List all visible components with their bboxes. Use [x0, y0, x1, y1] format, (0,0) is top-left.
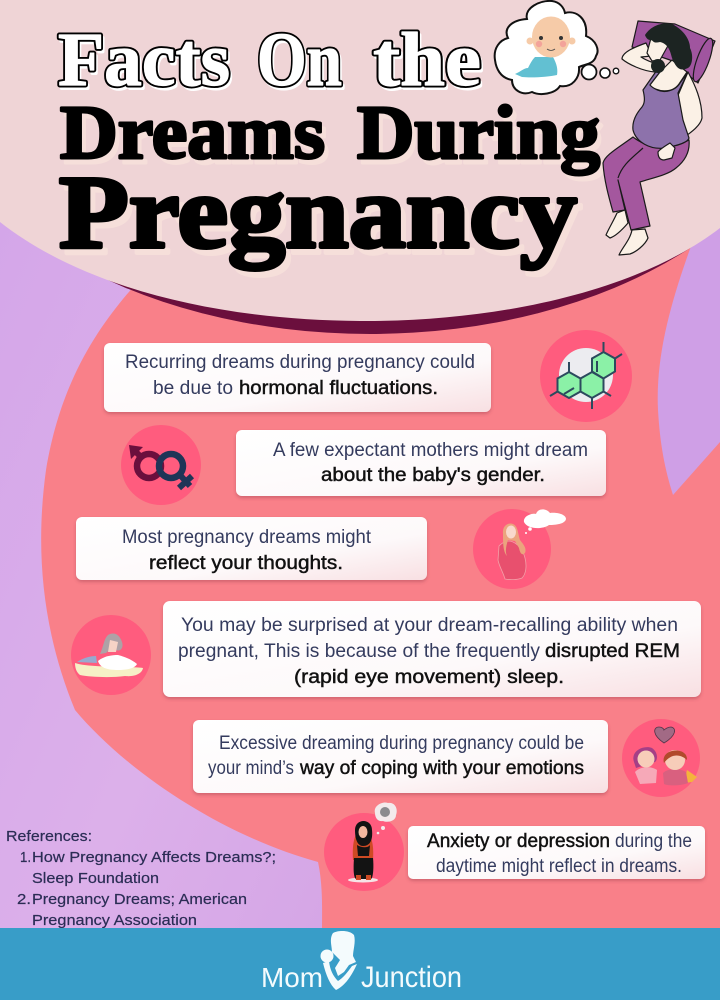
card: [76, 517, 427, 580]
hair under chin: [651, 59, 665, 73]
leg crease: [618, 148, 643, 178]
title line: Facts On the: the: [373, 18, 481, 102]
card text: about the baby's gender.: [321, 465, 545, 486]
illustration: pregnant woman sleeping: [603, 21, 717, 255]
card text: [178, 615, 680, 688]
card text: your mind’s: [208, 758, 294, 779]
card text: way of coping with your emotions: [299, 758, 584, 779]
card text: A few expectant mothers might dream: [273, 440, 588, 461]
card text: [122, 527, 372, 574]
title line: Facts On the: Facts: [60, 21, 232, 105]
card text: [125, 352, 475, 399]
right arm: [660, 72, 702, 144]
title line: Dreams During: During: [361, 96, 604, 180]
card text: be due to: [153, 378, 233, 399]
title line: Dreams During: During: [357, 91, 600, 175]
card text: Recurring dreams during pregnancy could: [125, 352, 475, 373]
pillow: [632, 21, 715, 83]
references: How Pregnancy Affects Dreams?;: [32, 849, 276, 866]
card text: [273, 440, 588, 486]
card text: Excessive dreaming during pregnancy could be: [219, 733, 584, 754]
hair: [645, 23, 692, 70]
card text: Anxiety or depression: [427, 831, 610, 852]
background: purple left shape: [0, 200, 322, 930]
chest skin: [650, 60, 687, 91]
icon: hormone molecule: [540, 330, 632, 422]
title line: Facts On the: the: [375, 21, 483, 105]
card: [193, 720, 608, 793]
hand: [658, 143, 675, 160]
card text: daytime might reflect in dreams.: [436, 856, 682, 877]
icon: two upset girls: [622, 719, 700, 797]
title: [58, 18, 604, 276]
header background: [0, 0, 720, 321]
title line: Facts On the: Facts: [58, 18, 230, 102]
icon: anxious woman: [324, 803, 404, 891]
raised arm: [622, 43, 660, 72]
fact 5: [193, 719, 700, 797]
fact 2: [121, 425, 606, 505]
header crescent: [0, 0, 720, 334]
card text: (rapid eye movement) sleep.: [294, 667, 564, 688]
foot front: [619, 229, 648, 255]
title line: Dreams During: Dreams: [64, 96, 329, 180]
illustration: thought bubble with baby: [495, 1, 619, 94]
footer band: [0, 928, 720, 1000]
title line: Pregnancy: Pregnancy: [59, 155, 577, 270]
card: [408, 826, 705, 879]
references: Sleep Foundation: [32, 870, 159, 887]
logo mark: [320, 931, 357, 990]
title line: Facts On the: On: [257, 18, 342, 102]
references: Pregnancy Dreams; American: [32, 891, 247, 908]
title line: Facts On the: the: [373, 18, 481, 102]
title line: Facts On the: Facts: [58, 18, 230, 102]
logo: MomJunction: [261, 931, 462, 994]
legs: [603, 137, 689, 230]
card: [236, 430, 606, 496]
title line: Facts On the: On: [259, 21, 344, 105]
title line: Facts On the: On: [257, 18, 342, 102]
card text: disrupted REM: [545, 641, 680, 662]
card text: pregnant, This is because of the frequently: [178, 641, 541, 662]
torso: [633, 70, 689, 148]
foot back: [606, 210, 628, 238]
title line: Pregnancy: Pregnancy: [64, 161, 582, 276]
background: purple right shape: [658, 220, 720, 495]
fact 3: [76, 509, 566, 589]
title line: Dreams During: [60, 91, 604, 180]
card text: You may be surprised at your dream-recalling ability when: [181, 615, 678, 636]
title line: Dreams During: Dreams: [60, 91, 325, 175]
card: [104, 343, 491, 412]
icon: gender symbols: [121, 425, 201, 505]
references: Pregnancy Association: [32, 912, 197, 929]
card: [163, 601, 701, 697]
card text: [427, 831, 692, 877]
logo: MomJunction: Mom: [261, 962, 323, 993]
references: 2.: [17, 891, 31, 908]
face: [647, 38, 670, 61]
card text: [208, 733, 584, 779]
references: 1.: [20, 849, 31, 866]
references: [6, 828, 276, 929]
card text: hormonal fluctuations.: [239, 378, 438, 399]
logo: MomJunction: Junction: [361, 961, 462, 994]
pillow end: [689, 36, 717, 84]
fact 1: [104, 330, 632, 422]
card text: reflect your thoughts.: [149, 553, 343, 574]
title line: Facts On the: [58, 18, 483, 105]
card text: Most pregnancy dreams might: [122, 527, 372, 548]
fact 4: [71, 601, 701, 697]
references: References:: [6, 828, 92, 845]
icon: woman on cloud: [71, 615, 151, 695]
card text: during the: [615, 831, 692, 852]
fact 6: [324, 803, 705, 891]
icon: thinking woman: [473, 509, 566, 589]
